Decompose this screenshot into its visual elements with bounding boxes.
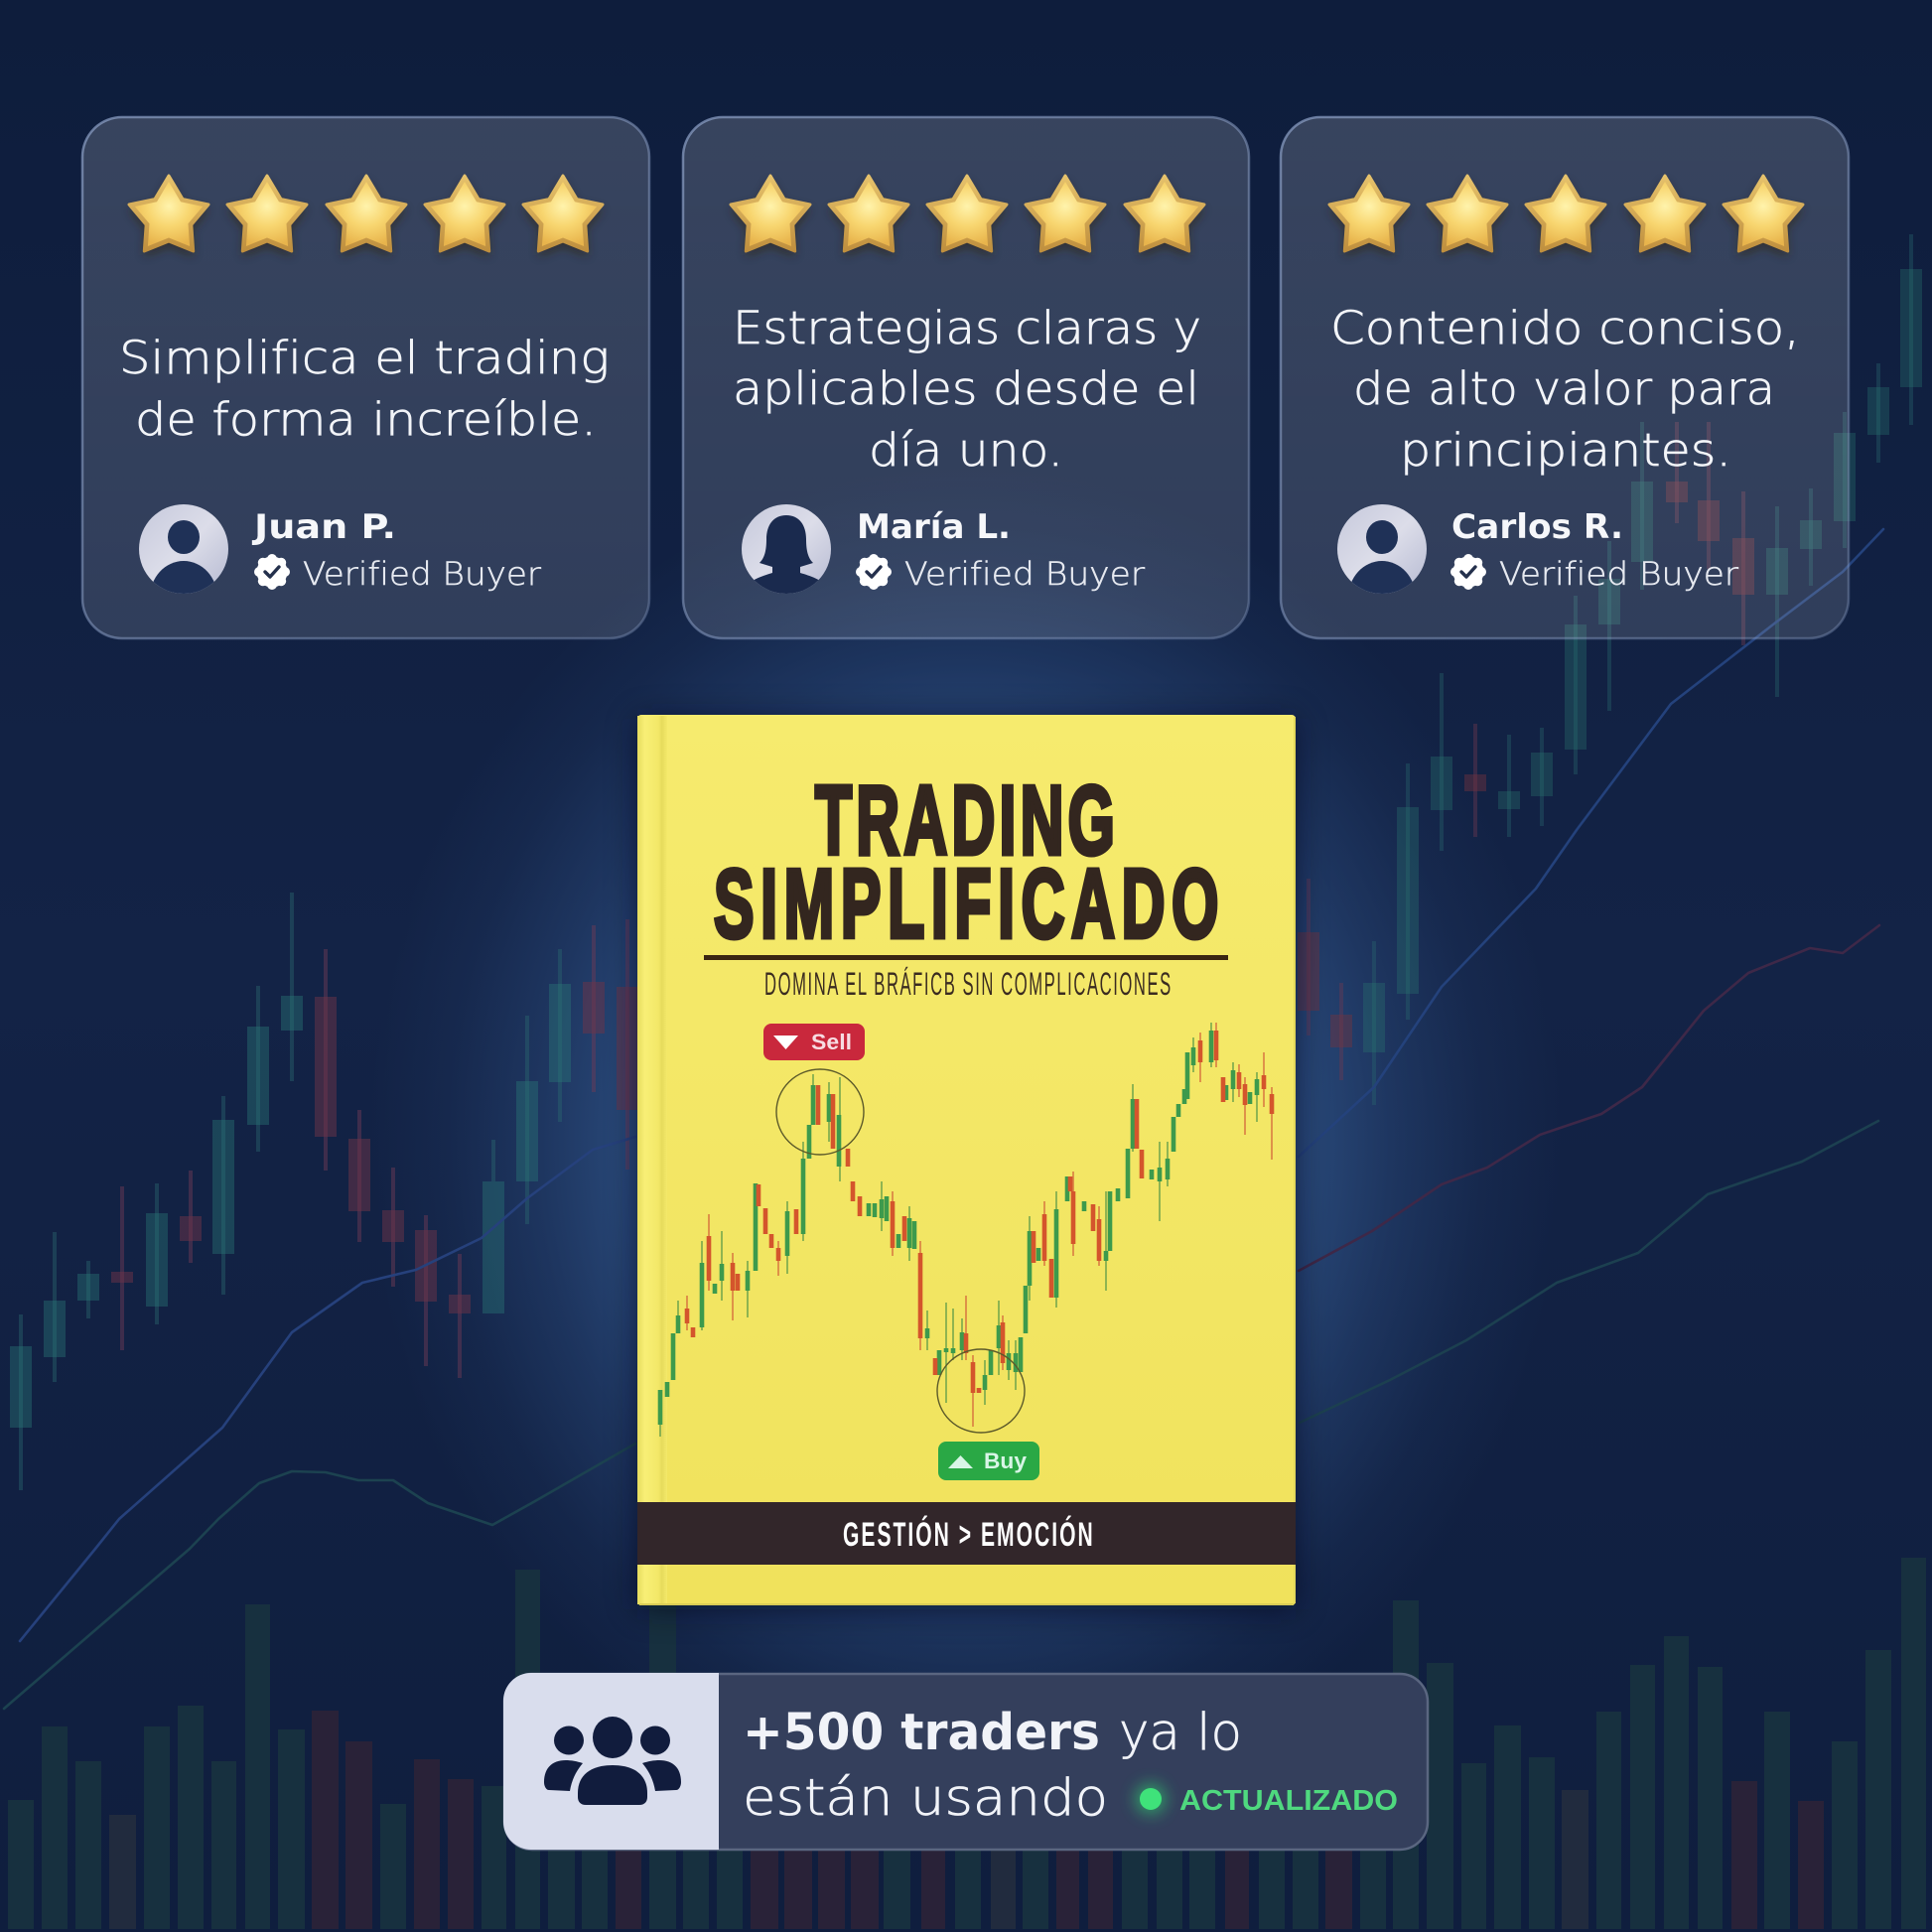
review quote xyxy=(1330,302,1800,477)
badge headline: ya lo xyxy=(1119,1704,1242,1762)
background volume bars xyxy=(8,1558,1926,1929)
icon panel: people xyxy=(503,1673,719,1850)
verified buyer: Verified Buyer xyxy=(1499,555,1739,593)
buy badge xyxy=(938,1442,1039,1480)
reviewer name: María L. xyxy=(857,507,1011,547)
panel: review Juan P. xyxy=(82,117,649,638)
avatar: man xyxy=(139,504,228,594)
review quote: día uno. xyxy=(869,424,1063,477)
avatar: man xyxy=(1337,504,1427,594)
five gold stars xyxy=(731,176,1204,256)
book title xyxy=(714,766,1218,959)
background trend lines xyxy=(4,529,1883,1709)
reviewer name: Juan P. xyxy=(252,507,396,547)
five gold stars xyxy=(129,176,603,256)
background candlesticks right xyxy=(1298,234,1922,1105)
panel: review Carlos R. xyxy=(1281,117,1849,638)
background candlesticks left xyxy=(10,893,638,1490)
review quote: Estrategias claras y xyxy=(733,302,1201,354)
book title: SIMPLIFICADO xyxy=(714,850,1218,959)
buy badge: Buy xyxy=(984,1449,1028,1473)
badge headline xyxy=(743,1704,1242,1828)
review quote: de forma increíble. xyxy=(135,393,597,446)
book subtitle: DOMINA EL BRÁFICB SIN COMPLICACIONES xyxy=(764,966,1171,1003)
reviewer name: Carlos R. xyxy=(1451,507,1623,547)
review quote: de alto valor para xyxy=(1353,362,1775,415)
verified buyer: Verified Buyer xyxy=(303,555,542,593)
buy marker circle xyxy=(937,1349,1025,1433)
status: actualizado: ACTUALIZADO xyxy=(1179,1785,1398,1817)
review quote: principiantes. xyxy=(1400,424,1731,477)
cover bottom band: GESTIÓN > EMOCIÓN xyxy=(843,1515,1093,1553)
review quote: Simplifica el trading xyxy=(119,332,610,384)
cover bottom band xyxy=(637,1502,1296,1565)
review quote xyxy=(733,302,1201,477)
five gold stars xyxy=(1329,176,1803,256)
sell badge: Sell xyxy=(811,1030,852,1054)
sell badge xyxy=(763,1024,865,1060)
book title: TRADING xyxy=(815,766,1115,876)
sell marker circle xyxy=(776,1069,864,1155)
avatar: woman xyxy=(742,504,831,599)
social proof badge xyxy=(503,1673,1428,1850)
verified buyer: Verified Buyer xyxy=(904,555,1146,593)
review quote: Contenido conciso, xyxy=(1330,302,1800,354)
review quote xyxy=(119,332,610,446)
panel: review María L. xyxy=(683,117,1249,638)
review quote: aplicables desde el xyxy=(733,362,1199,415)
badge headline: +500 traders xyxy=(743,1704,1100,1762)
book xyxy=(637,715,1296,1609)
candlestick chart on cover xyxy=(660,1023,1272,1437)
badge headline: están usando xyxy=(743,1769,1108,1828)
